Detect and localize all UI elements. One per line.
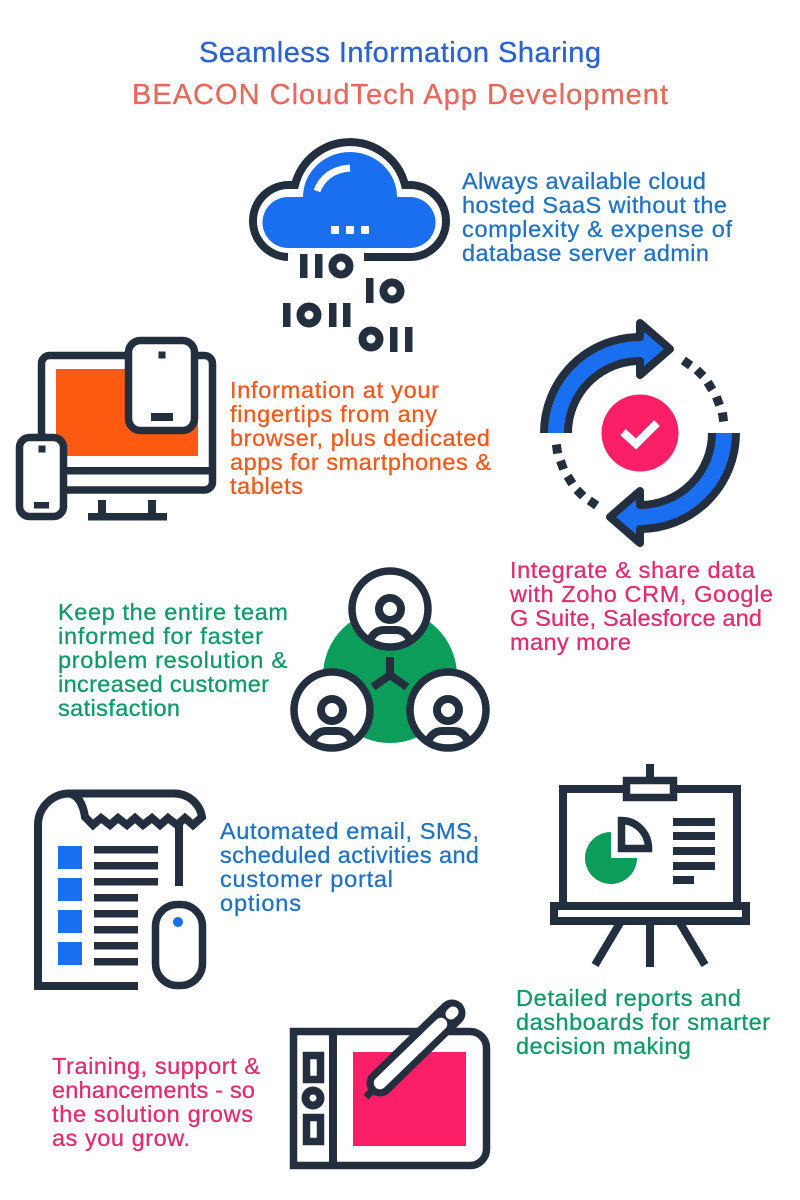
text: team: increased customer — [58, 671, 269, 697]
text: integration — [509, 557, 773, 655]
text: training — [52, 1053, 260, 1151]
text: devices — [230, 377, 491, 499]
icon: team circles — [294, 571, 486, 748]
text: devices: Information at your — [230, 377, 439, 403]
icon: cloud with binary — [253, 142, 446, 352]
panel: integration — [509, 323, 773, 655]
text: training: Training, support & — [52, 1053, 260, 1079]
text: cloud hosting: hosted SaaS without the — [462, 192, 727, 218]
text: devices: fingertips from any — [230, 401, 437, 427]
text: training: as you grow. — [52, 1125, 190, 1151]
text: automation: scheduled activities and — [220, 842, 479, 868]
text: training: the solution grows — [52, 1101, 253, 1127]
icon: sync arrows with check — [544, 323, 736, 543]
panel: cloud hosting — [253, 142, 732, 352]
text: team: informed for faster — [58, 623, 263, 649]
text: automation: customer portal — [220, 866, 393, 892]
text: automation — [220, 818, 479, 916]
text: team: Keep the entire team — [58, 599, 288, 625]
text: team — [58, 599, 288, 721]
icon: document and mouse — [38, 793, 202, 986]
text: team: problem resolution & — [58, 647, 287, 673]
text: integration: with Zoho CRM, Google — [509, 581, 773, 607]
text: training: enhancements - so — [52, 1077, 255, 1103]
text: devices: browser, plus dedicated — [230, 425, 490, 451]
text: integration: many more — [510, 629, 631, 655]
text: devices: tablets — [230, 473, 303, 499]
text: integration: G Suite, Salesforce and — [510, 605, 762, 631]
text: cloud hosting: Always available cloud — [462, 168, 706, 194]
text: cloud hosting — [462, 168, 732, 266]
text: cloud hosting: complexity & expense of — [462, 216, 732, 242]
text: cloud hosting: database server admin — [462, 240, 709, 266]
panel: automation — [38, 793, 479, 986]
text: automation: Automated email, SMS, — [220, 818, 479, 844]
icon: drawing tablet and pen — [294, 1012, 486, 1167]
panel: reports — [516, 764, 770, 1059]
panel: devices — [20, 340, 491, 520]
text: reports: dashboards for smarter — [516, 1009, 770, 1035]
title block — [132, 37, 668, 111]
text: team: satisfaction — [58, 695, 180, 721]
title line 2: BEACON CloudTech App Development — [132, 79, 668, 111]
text: integration: Integrate & share data — [510, 557, 756, 583]
text: reports: Detailed reports and — [516, 985, 741, 1011]
icon: monitor and phones — [20, 340, 214, 520]
text: reports: decision making — [516, 1033, 691, 1059]
title line 1: Seamless Information Sharing — [199, 37, 601, 69]
panel: team — [58, 571, 486, 748]
text: reports — [516, 985, 770, 1059]
text: devices: apps for smartphones & — [230, 449, 491, 475]
icon: presentation easel — [554, 764, 746, 967]
text: automation: options — [220, 890, 301, 916]
panel: training — [52, 1012, 486, 1167]
